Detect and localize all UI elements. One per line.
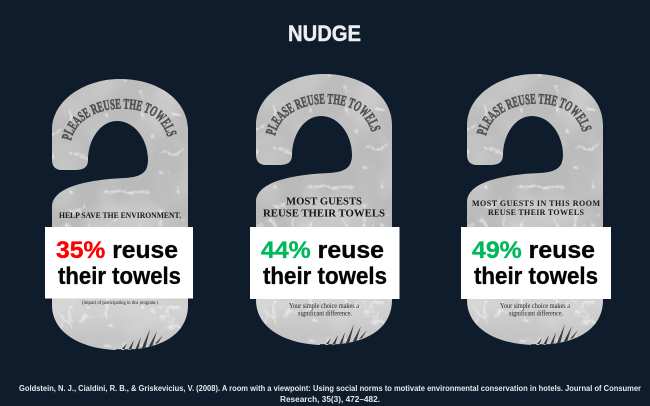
small print bbox=[500, 302, 571, 318]
hanger message: REUSE THEIR TOWELS bbox=[263, 208, 385, 220]
hanger shape with curved heading bbox=[254, 72, 394, 347]
result statistic: 35% reuse bbox=[56, 237, 178, 264]
hanger message: HELP SAVE THE ENVIRONMENT. bbox=[59, 210, 181, 220]
panel: door hanger social norm message bbox=[250, 72, 400, 347]
hanger message: REUSE THEIR TOWELS bbox=[488, 208, 585, 217]
small print: (impact of participating in this program.) bbox=[82, 299, 158, 306]
panel: door hanger environment message bbox=[45, 77, 193, 352]
result statistic: 49% reuse bbox=[472, 237, 595, 264]
citation: Research, 35(3), 472–482. bbox=[280, 395, 380, 404]
hanger message: MOST GUESTS bbox=[286, 196, 362, 208]
result caption: their towels bbox=[474, 263, 598, 290]
hanger message bbox=[263, 196, 385, 220]
small print: Your simple choice makes a bbox=[500, 302, 571, 310]
hanger message: MOST GUESTS IN THIS ROOM bbox=[472, 199, 600, 208]
white result box bbox=[461, 227, 611, 299]
small print: significant difference. bbox=[298, 310, 352, 318]
title: NUDGE bbox=[288, 21, 361, 46]
small print bbox=[289, 302, 360, 318]
citation bbox=[19, 384, 641, 404]
small print: significant difference. bbox=[509, 310, 563, 318]
result caption: their towels bbox=[58, 263, 181, 290]
result statistic: 44% reuse bbox=[261, 237, 384, 264]
small print: Your simple choice makes a bbox=[289, 302, 360, 310]
result caption: their towels bbox=[263, 263, 387, 290]
panel: door hanger same-room norm message bbox=[461, 72, 611, 347]
white result box bbox=[45, 227, 193, 298]
hanger message bbox=[472, 199, 600, 217]
hanger shape with curved heading bbox=[50, 77, 190, 352]
white result box bbox=[250, 227, 400, 299]
hanger shape with curved heading bbox=[465, 72, 605, 347]
